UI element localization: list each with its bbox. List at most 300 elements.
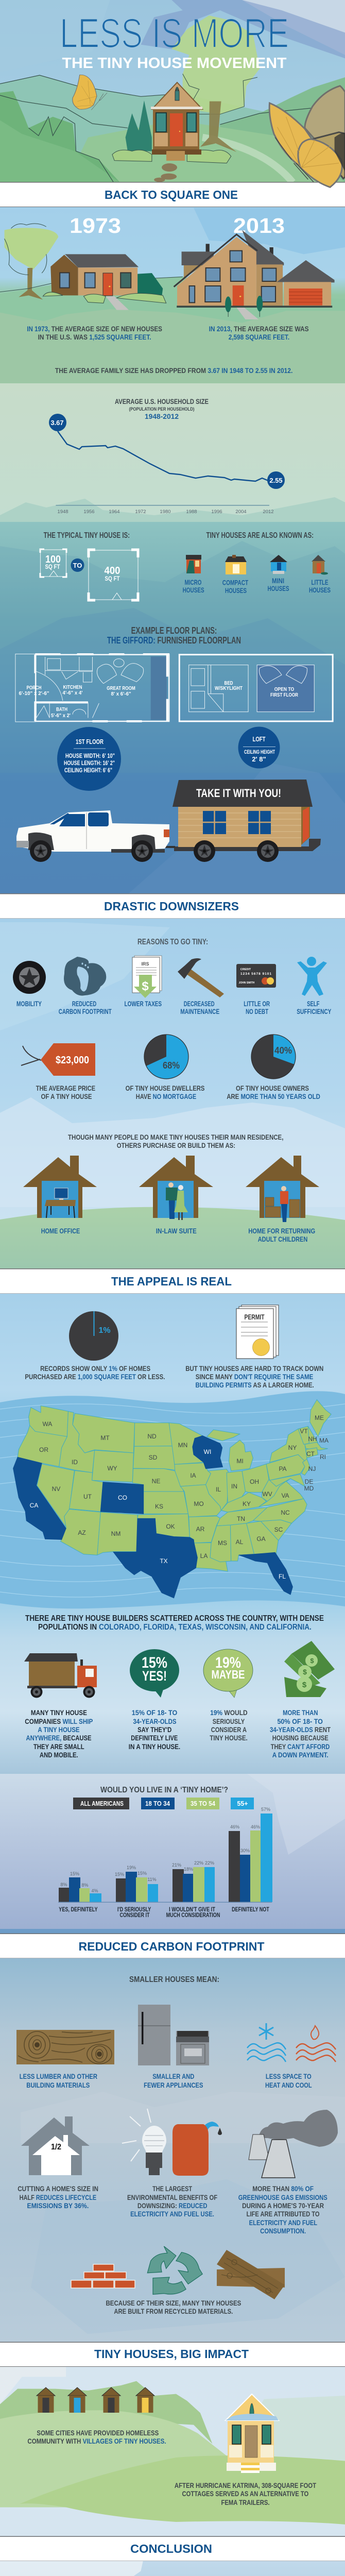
state labels: KY	[243, 1500, 251, 1507]
state labels: WV	[262, 1490, 272, 1498]
text: katrina: COTTAGES SERVED AS AN ALTERNATIVE TO	[182, 2489, 308, 2498]
state labels: CA	[30, 1502, 38, 1509]
heading: TINY HOUSES, BIG IMPACT	[94, 2347, 249, 2361]
floor plan: first floor: 5'-6" x 2'	[51, 713, 71, 719]
icon: butterfly small	[73, 75, 107, 110]
text: ship anywhere: THEY ARE SMALL	[33, 1742, 84, 1751]
use: returning adult children	[246, 1156, 319, 1243]
chart title	[115, 397, 209, 420]
item: appliances: SMALLER AND	[152, 2072, 194, 2080]
state labels: TX	[160, 1557, 168, 1565]
bar chart: 57%	[261, 1807, 270, 1812]
section band: the appeal is real	[0, 1268, 345, 1294]
chart axis: 1948	[57, 509, 68, 515]
panel: back to square one houses	[0, 207, 345, 409]
icon: permit: PERMIT	[244, 1313, 265, 1321]
item: power plant: ELECTRICITY AND FUEL	[249, 2218, 318, 2227]
text: down payment	[270, 1708, 331, 1759]
text: recycled: ARE BUILT FROM RECYCLED MATERIALS.	[114, 2307, 233, 2315]
text: 19 percent: TINY HOUSE.	[210, 1734, 248, 1742]
chart axis: 1956	[83, 509, 95, 515]
chart axis: 1964	[109, 509, 120, 515]
panel: the appeal is real	[0, 1294, 345, 1774]
illustration: tiny house trailer: TAKE IT WITH YOU!	[196, 787, 281, 800]
text: builders	[25, 1614, 324, 1632]
text: 15 percent: 15% OF 18- TO	[132, 1708, 177, 1717]
chart axis	[56, 505, 274, 515]
text: villages	[27, 2429, 166, 2445]
pie chart: 40 percent	[227, 1035, 320, 1100]
use: in-law suite: IN-LAW SUITE	[156, 1227, 197, 1235]
state labels: IA	[190, 1472, 196, 1479]
state labels: KS	[155, 1503, 163, 1510]
state labels: AL	[236, 1538, 244, 1546]
state labels: MI	[236, 1458, 244, 1465]
state labels: AZ	[78, 1529, 86, 1536]
state labels: WY	[107, 1465, 117, 1472]
floor plan: first floor: 8' x 6'-6"	[111, 691, 131, 697]
state labels: MN	[178, 1442, 187, 1449]
reason: decreased maintenance	[178, 958, 224, 1015]
text: 19 percent	[210, 1708, 248, 1742]
item: half size house	[18, 2116, 98, 2210]
trunk	[200, 101, 236, 152]
state labels: DE	[305, 1478, 313, 1485]
text: 2013 size	[209, 325, 309, 341]
text: ship anywhere: COMPANIES WILL SHIP	[25, 1717, 93, 1725]
state labels: LA	[200, 1552, 208, 1560]
pie chart: 1 percent	[25, 1311, 165, 1381]
text: down payment: 50% OF 18- TO	[277, 1717, 323, 1725]
reason: decreased maintenance: DECREASED	[184, 999, 215, 1008]
bar chart: 15%	[137, 1871, 147, 1876]
bar chart: 46%	[251, 1824, 260, 1829]
item: power plant	[238, 2110, 338, 2235]
item: little houses: HOUSES	[309, 586, 331, 594]
icon: to: TO	[73, 562, 82, 569]
stat: average price	[21, 1043, 95, 1100]
pie chart: 68 percent: 68%	[163, 1060, 180, 1071]
icon: bricks	[71, 2264, 135, 2288]
item: power plant: DURING A HOME'S 70-YEAR	[242, 2201, 324, 2210]
item: mini houses: MINI	[272, 577, 284, 585]
text: other uses: OTHERS PURCHASE OR BUILD THEM AS:	[117, 1141, 235, 1149]
title	[60, 10, 289, 72]
state labels: SD	[149, 1454, 158, 1461]
speech bubble: 15 percent yes: YES!	[142, 1668, 167, 1684]
use: home office	[23, 1156, 97, 1235]
bar chart: 30%	[240, 1848, 250, 1853]
state labels: NM	[111, 1530, 120, 1537]
bar chart: 46%	[230, 1824, 239, 1829]
item: bulb and fuel: ENVIRONMENTAL BENEFITS OF	[127, 2193, 218, 2201]
floor plan: loft: FIRST FLOOR	[270, 692, 298, 698]
state labels: ID	[72, 1459, 78, 1466]
year 1973: 1973	[70, 214, 121, 238]
callout: loft: LOFT	[252, 735, 266, 743]
icon: village of tiny houses	[37, 2387, 154, 2413]
item: half size house: EMISSIONS BY 36%.	[27, 2201, 89, 2210]
icon: 2013 house	[174, 230, 335, 319]
chart categories: MUCH CONSIDERATION	[166, 1911, 220, 1919]
heading: typical tiny house: THE TYPICAL TINY HOUSE IS:	[44, 531, 130, 540]
state labels: TN	[237, 1515, 245, 1522]
data point: 2.55: 2.55	[269, 477, 283, 484]
speech bubble: 15 percent yes: 15%	[142, 1654, 167, 1671]
reason: mobility: MOBILITY	[16, 999, 42, 1008]
stat: average price: THE AVERAGE PRICE	[36, 1084, 95, 1092]
speech bubble: 19 percent maybe: MAYBE	[211, 1668, 245, 1681]
state labels: OR	[39, 1446, 48, 1453]
state labels: OK	[166, 1523, 175, 1530]
bar chart: 15%	[70, 1871, 79, 1876]
bar chart: 15%	[115, 1872, 124, 1877]
bar chart: 11%	[147, 1877, 157, 1882]
chart legend: 35 TO 54	[191, 1800, 216, 1807]
panel: household size chart	[0, 383, 345, 522]
icon: money: $	[303, 1668, 307, 1676]
pie chart: 68 percent: HAVE NO MORTGAGE	[136, 1092, 196, 1100]
bar chart: 8%	[81, 1883, 89, 1888]
state labels: CO	[118, 1494, 127, 1501]
hills back	[0, 75, 345, 182]
icon: money: $	[302, 1681, 307, 1689]
text: 1973 size	[27, 325, 162, 341]
text: recycled	[106, 2299, 241, 2315]
reason: carbon footprint: REDUCED	[72, 999, 96, 1008]
state labels: SC	[274, 1526, 283, 1533]
item: little houses: LITTLE	[311, 578, 329, 586]
item: lumber	[16, 2030, 114, 2089]
diagram: 400 sq ft: 400	[104, 565, 120, 577]
reason: self sufficiency: SUFFICIENCY	[297, 1007, 332, 1015]
heading: floor plans: EXAMPLE FLOOR PLANS:	[131, 625, 217, 636]
reason: little or no debt: NO DEBT	[246, 1007, 268, 1015]
subtitle: THE TINY HOUSE MOVEMENT	[62, 55, 287, 72]
diagram: 100 sq ft: SQ FT	[45, 563, 60, 570]
text: 15 percent	[129, 1708, 180, 1751]
heading: REDUCED CARBON FOOTPRINT	[78, 1940, 265, 1953]
pie chart: 40 percent: OF TINY HOUSE OWNERS	[236, 1084, 309, 1092]
item: half size house: 1/2	[51, 2143, 61, 2151]
use: home office: HOME OFFICE	[41, 1227, 80, 1235]
state labels: PA	[279, 1465, 287, 1472]
text: 19 percent: CONSIDER A	[211, 1725, 247, 1734]
stat: average price: OF A TINY HOUSE	[41, 1092, 92, 1100]
icon: recycle	[147, 2246, 202, 2294]
chart categories: DEFINITELY NOT	[232, 1906, 269, 1913]
left hill	[0, 91, 120, 182]
state labels: NV	[52, 1485, 60, 1493]
text: down payment: 34-YEAR-OLDS RENT	[270, 1725, 331, 1734]
item: compact houses: HOUSES	[225, 586, 247, 595]
state labels: NJ	[308, 1465, 316, 1472]
pie chart: 40 percent: 40%	[274, 1045, 292, 1056]
section band: drastic downsizers	[0, 893, 345, 919]
chart title: (POPULATION PER HOUSEHOLD)	[129, 406, 195, 412]
icon: shipping truck	[24, 1653, 97, 1698]
item: little houses	[309, 555, 331, 594]
heading: reasons: REASONS TO GO TINY:	[137, 938, 208, 946]
floor plan: first floor: BATH	[56, 707, 67, 713]
item: heat and cool: HEAT AND COOL	[265, 2081, 312, 2089]
reason: little or no debt: JOHN SMITH	[239, 981, 255, 985]
reason: carbon footprint: CARBON FOOTPRINT	[59, 1007, 112, 1015]
state labels: WI	[204, 1448, 211, 1455]
data point: 3.67	[49, 414, 66, 431]
item: half size house: CUTTING A HOME'S SIZE IN	[18, 2184, 98, 2193]
state labels: CT	[306, 1450, 315, 1458]
reason: lower taxes: IRS	[141, 961, 149, 967]
watercolor sky	[0, 0, 345, 182]
chart axis: 1980	[160, 509, 171, 515]
floor plan: loft	[179, 655, 333, 721]
floor plan: first floor: KITCHEN	[63, 684, 82, 690]
state labels: MO	[194, 1500, 204, 1507]
text: 2013 size: IN 2013, THE AVERAGE SIZE WAS	[209, 325, 309, 333]
state labels: UT	[83, 1493, 92, 1500]
item: power plant: LIFE ARE ATTRIBUTED TO	[247, 2210, 320, 2218]
item: bulb and fuel: THE LARGEST	[152, 2184, 192, 2193]
icon: tiny house	[151, 82, 202, 161]
floor plan: first floor: GREAT ROOM	[107, 685, 135, 691]
item: half size house: HALF REDUCES LIFECYCLE	[20, 2193, 96, 2201]
text: down payment: MORE THAN	[283, 1708, 318, 1717]
text: ship anywhere: AND MOBILE.	[40, 1751, 78, 1759]
text: villages: SOME CITIES HAVE PROVIDED HOMELESS	[37, 2429, 159, 2437]
callout: 1st floor: CEILING HEIGHT: 6' 6"	[64, 768, 112, 774]
state labels: ND	[147, 1433, 157, 1440]
item: micro houses: HOUSES	[183, 586, 204, 594]
heading: BACK TO SQUARE ONE	[105, 188, 238, 201]
bar chart: 21%	[172, 1862, 181, 1868]
bar chart: 8%	[60, 1882, 67, 1887]
icon: permit: BUILDING PERMITS AS A LARGER HOME.	[196, 1381, 314, 1389]
chart legend: 55+	[237, 1800, 248, 1807]
year 2013: 2013	[233, 214, 285, 238]
text: down payment: HOUSING BECAUSE	[272, 1734, 329, 1742]
diagram: 400 sq ft: SQ FT	[105, 575, 120, 582]
text: 15 percent: 34-YEAR-OLDS	[133, 1717, 177, 1725]
illustration: pickup truck	[16, 810, 169, 862]
item: mini houses	[268, 555, 289, 592]
chart categories	[59, 1906, 269, 1919]
chart axis: 1988	[186, 509, 197, 515]
text: 15 percent: IN A TINY HOUSE.	[129, 1742, 180, 1751]
state labels	[30, 1414, 329, 1580]
state labels: ME	[315, 1414, 324, 1421]
state labels: MS	[218, 1539, 227, 1547]
panel: typical tiny house and floor plans	[0, 522, 345, 894]
panel: tiny houses big impact	[0, 2367, 345, 2536]
icon: large butterfly	[269, 86, 345, 187]
icon: money	[284, 1641, 335, 1697]
text: 1973 size: IN 1973, THE AVERAGE SIZE OF NEW HOUSES	[27, 325, 162, 333]
icon: wood planks	[217, 2250, 285, 2299]
heading: floor plans	[107, 625, 241, 646]
rocks	[162, 163, 177, 172]
reason: carbon footprint	[59, 957, 112, 1015]
text: other uses: THOUGH MANY PEOPLE DO MAKE TINY HOUSES THEIR MAIN RESIDENCE,	[68, 1133, 283, 1141]
pie chart: 40 percent: ARE MORE THAN 50 YEARS OLD	[227, 1092, 320, 1100]
text: 15 percent: DEFINITELY LIVE	[131, 1734, 178, 1742]
heading: DRASTIC DOWNSIZERS	[104, 900, 239, 913]
text: 19 percent: 19% WOULD	[210, 1708, 248, 1717]
bar chart: 22%	[194, 1860, 203, 1866]
item: power plant: CONSUMPTION.	[260, 2227, 306, 2235]
state labels: OH	[250, 1478, 259, 1485]
reason: self sufficiency: SELF	[307, 999, 320, 1008]
chart categories: I'D SERIOUSLY	[117, 1906, 151, 1913]
panel: conclusion	[0, 2561, 345, 2576]
item: lumber: LESS LUMBER AND OTHER	[20, 2072, 97, 2080]
item: lumber: BUILDING MATERIALS	[26, 2081, 90, 2089]
reason: little or no debt: LITTLE OR	[244, 999, 270, 1008]
floor plan: loft: OPEN TO	[274, 686, 294, 692]
clouds	[0, 2561, 345, 2576]
diagram: 100 sq ft	[40, 549, 66, 577]
bar chart	[58, 1807, 272, 1903]
item: bulb and fuel	[122, 2109, 222, 2218]
panel: header scene	[0, 0, 345, 183]
chart legend: ALL AMERICANS	[80, 1800, 124, 1807]
chart title: 1948-2012	[145, 412, 179, 420]
state labels: NE	[152, 1478, 160, 1485]
item: bulb and fuel: ELECTRICITY AND FUEL USE.	[130, 2210, 214, 2218]
chart axis: 1972	[135, 509, 146, 515]
reason: lower taxes	[125, 956, 162, 1008]
floor plan: first floor: 4'-6" x 4'	[63, 690, 82, 696]
callout: 1st floor: HOUSE WIDTH: 6' 10"	[65, 753, 115, 759]
reason: little or no debt: CREDIT	[240, 968, 251, 971]
chart axis: 2004	[235, 509, 247, 515]
chart legend: 18 TO 34	[145, 1800, 170, 1807]
text: 1973 size: IN THE U.S. WAS 1,525 SQUARE FEET.	[38, 333, 151, 341]
use: returning adult children: HOME FOR RETURNING	[248, 1227, 315, 1235]
teal tree	[126, 100, 152, 151]
chart categories: I WOULDN'T GIVE IT	[169, 1906, 215, 1913]
wave band	[0, 1391, 345, 1608]
icon: money: $	[310, 1657, 314, 1665]
text: 19 percent: SERIOUSLY	[213, 1717, 245, 1725]
section band: tiny houses big impact	[0, 2342, 345, 2367]
state labels: WA	[43, 1420, 52, 1428]
text: 2013 size: 2,598 SQUARE FEET.	[229, 333, 289, 341]
icon: permit: SINCE MANY DON'T REQUIRE THE SAME	[196, 1372, 313, 1381]
item: compact houses: COMPACT	[222, 578, 249, 586]
line chart: household size	[58, 431, 268, 481]
text: ship anywhere: A TINY HOUSE	[38, 1725, 80, 1734]
data point: 2.55	[267, 471, 285, 489]
speech bubble: 19 percent maybe	[203, 1649, 253, 1698]
reason: lower taxes: LOWER TAXES	[125, 999, 162, 1008]
panel: drastic downsizers	[0, 919, 345, 1269]
chart categories: YES, DEFINITELY	[59, 1906, 97, 1913]
bushes	[112, 150, 152, 161]
data point: 3.67: 3.67	[50, 419, 64, 427]
state labels: VT	[300, 1428, 308, 1435]
item: micro houses: MICRO	[184, 578, 202, 586]
state labels: IN	[231, 1483, 237, 1490]
state labels: MT	[100, 1434, 110, 1442]
icon: 1973 house	[43, 254, 166, 310]
icon: permit	[185, 1305, 323, 1389]
use: returning adult children: ADULT CHILDREN	[258, 1235, 307, 1243]
item: bulb and fuel: DOWNSIZING: REDUCED	[137, 2201, 208, 2210]
diagram: 400 sq ft	[89, 550, 138, 600]
item: compact houses	[222, 555, 249, 595]
state labels: VA	[281, 1492, 289, 1499]
text: ship anywhere: MANY TINY HOUSE	[31, 1708, 87, 1717]
hill	[0, 1207, 345, 1269]
text: recycled: BECAUSE OF THEIR SIZE, MANY TINY HOUSES	[106, 2299, 241, 2307]
item: power plant: MORE THAN 80% OF	[252, 2184, 314, 2193]
tree foliage	[171, 15, 260, 114]
callout: 1st floor	[57, 727, 121, 791]
heading: floor plans: THE GIFFORD: FURNISHED FLOORPLAN	[107, 635, 241, 646]
bar chart: 19%	[127, 1865, 136, 1870]
text: villages: COMMUNITY WITH VILLAGES OF TINY HOUSES.	[27, 2437, 166, 2445]
callout: 1st floor: HOUSE LENGTH: 16' 2"	[64, 760, 115, 767]
chart title: WOULD YOU LIVE IN A ‘TINY HOME’?	[100, 1786, 228, 1794]
floor plan: loft: BED	[225, 680, 233, 686]
reason: decreased maintenance: MAINTENANCE	[180, 1007, 219, 1015]
floor plan: first floor	[15, 654, 169, 722]
text: family size: THE AVERAGE FAMILY SIZE HAS DROPPED FROM 3.67 IN 1948 TO 2.55 IN 2012.	[55, 366, 292, 375]
state labels: NY	[288, 1444, 297, 1451]
state labels: GA	[256, 1535, 266, 1543]
text: ship anywhere: ANYWHERE, BECAUSE	[26, 1734, 92, 1742]
floor plan: first floor: 6'-10" x 2'-6"	[19, 690, 49, 697]
diagram: 100 sq ft: 100	[45, 554, 61, 565]
reason: mobility	[13, 961, 46, 1008]
section band: reduced carbon footprint	[0, 1933, 345, 1959]
item: appliances: FEWER APPLIANCES	[144, 2081, 203, 2089]
text: 15 percent: SAY THEY'D	[137, 1725, 171, 1734]
icon: katrina cottage	[226, 2394, 279, 2473]
callout: 1st floor: 1ST FLOOR	[76, 738, 104, 745]
chart legend	[73, 1798, 254, 1809]
chart axis: 1996	[211, 509, 222, 515]
floor plan: first floor: PORCH	[27, 685, 41, 691]
item: micro houses	[183, 555, 204, 594]
panel: reduced carbon footprint	[0, 1958, 345, 2342]
map: united states	[13, 1400, 331, 1598]
pie chart: 1 percent: 1%	[98, 1326, 111, 1335]
reason: little or no debt	[236, 964, 276, 1015]
hills	[0, 2367, 345, 2524]
text: katrina: AFTER HURRICANE KATRINA, 308-SQUARE FOOT	[175, 2481, 316, 2489]
item: heat and cool: LESS SPACE TO	[266, 2072, 312, 2080]
state labels: AR	[196, 1526, 205, 1533]
state labels: MA	[319, 1437, 329, 1444]
state labels: RI	[320, 1453, 326, 1461]
state labels: NH	[308, 1435, 317, 1443]
text: down payment: THEY CAN'T AFFORD	[271, 1742, 330, 1751]
text: down payment: A DOWN PAYMENT.	[272, 1751, 329, 1759]
bar chart: 18%	[184, 1867, 193, 1872]
chart categories: CONSIDER IT	[119, 1911, 150, 1919]
chart axis: 2012	[263, 509, 274, 515]
pie chart: 1 percent: RECORDS SHOW ONLY 1% OF HOMES	[40, 1364, 150, 1372]
item: heat and cool	[247, 2023, 336, 2089]
pie chart: 68 percent: OF TINY HOUSE DWELLERS	[126, 1084, 204, 1092]
text: ship anywhere	[25, 1708, 93, 1759]
state labels: NC	[281, 1509, 290, 1516]
heading: THE APPEAL IS REAL	[111, 1275, 232, 1288]
heading: smaller houses mean: SMALLER HOUSES MEAN:	[129, 1975, 219, 1984]
icon: to	[71, 558, 84, 572]
